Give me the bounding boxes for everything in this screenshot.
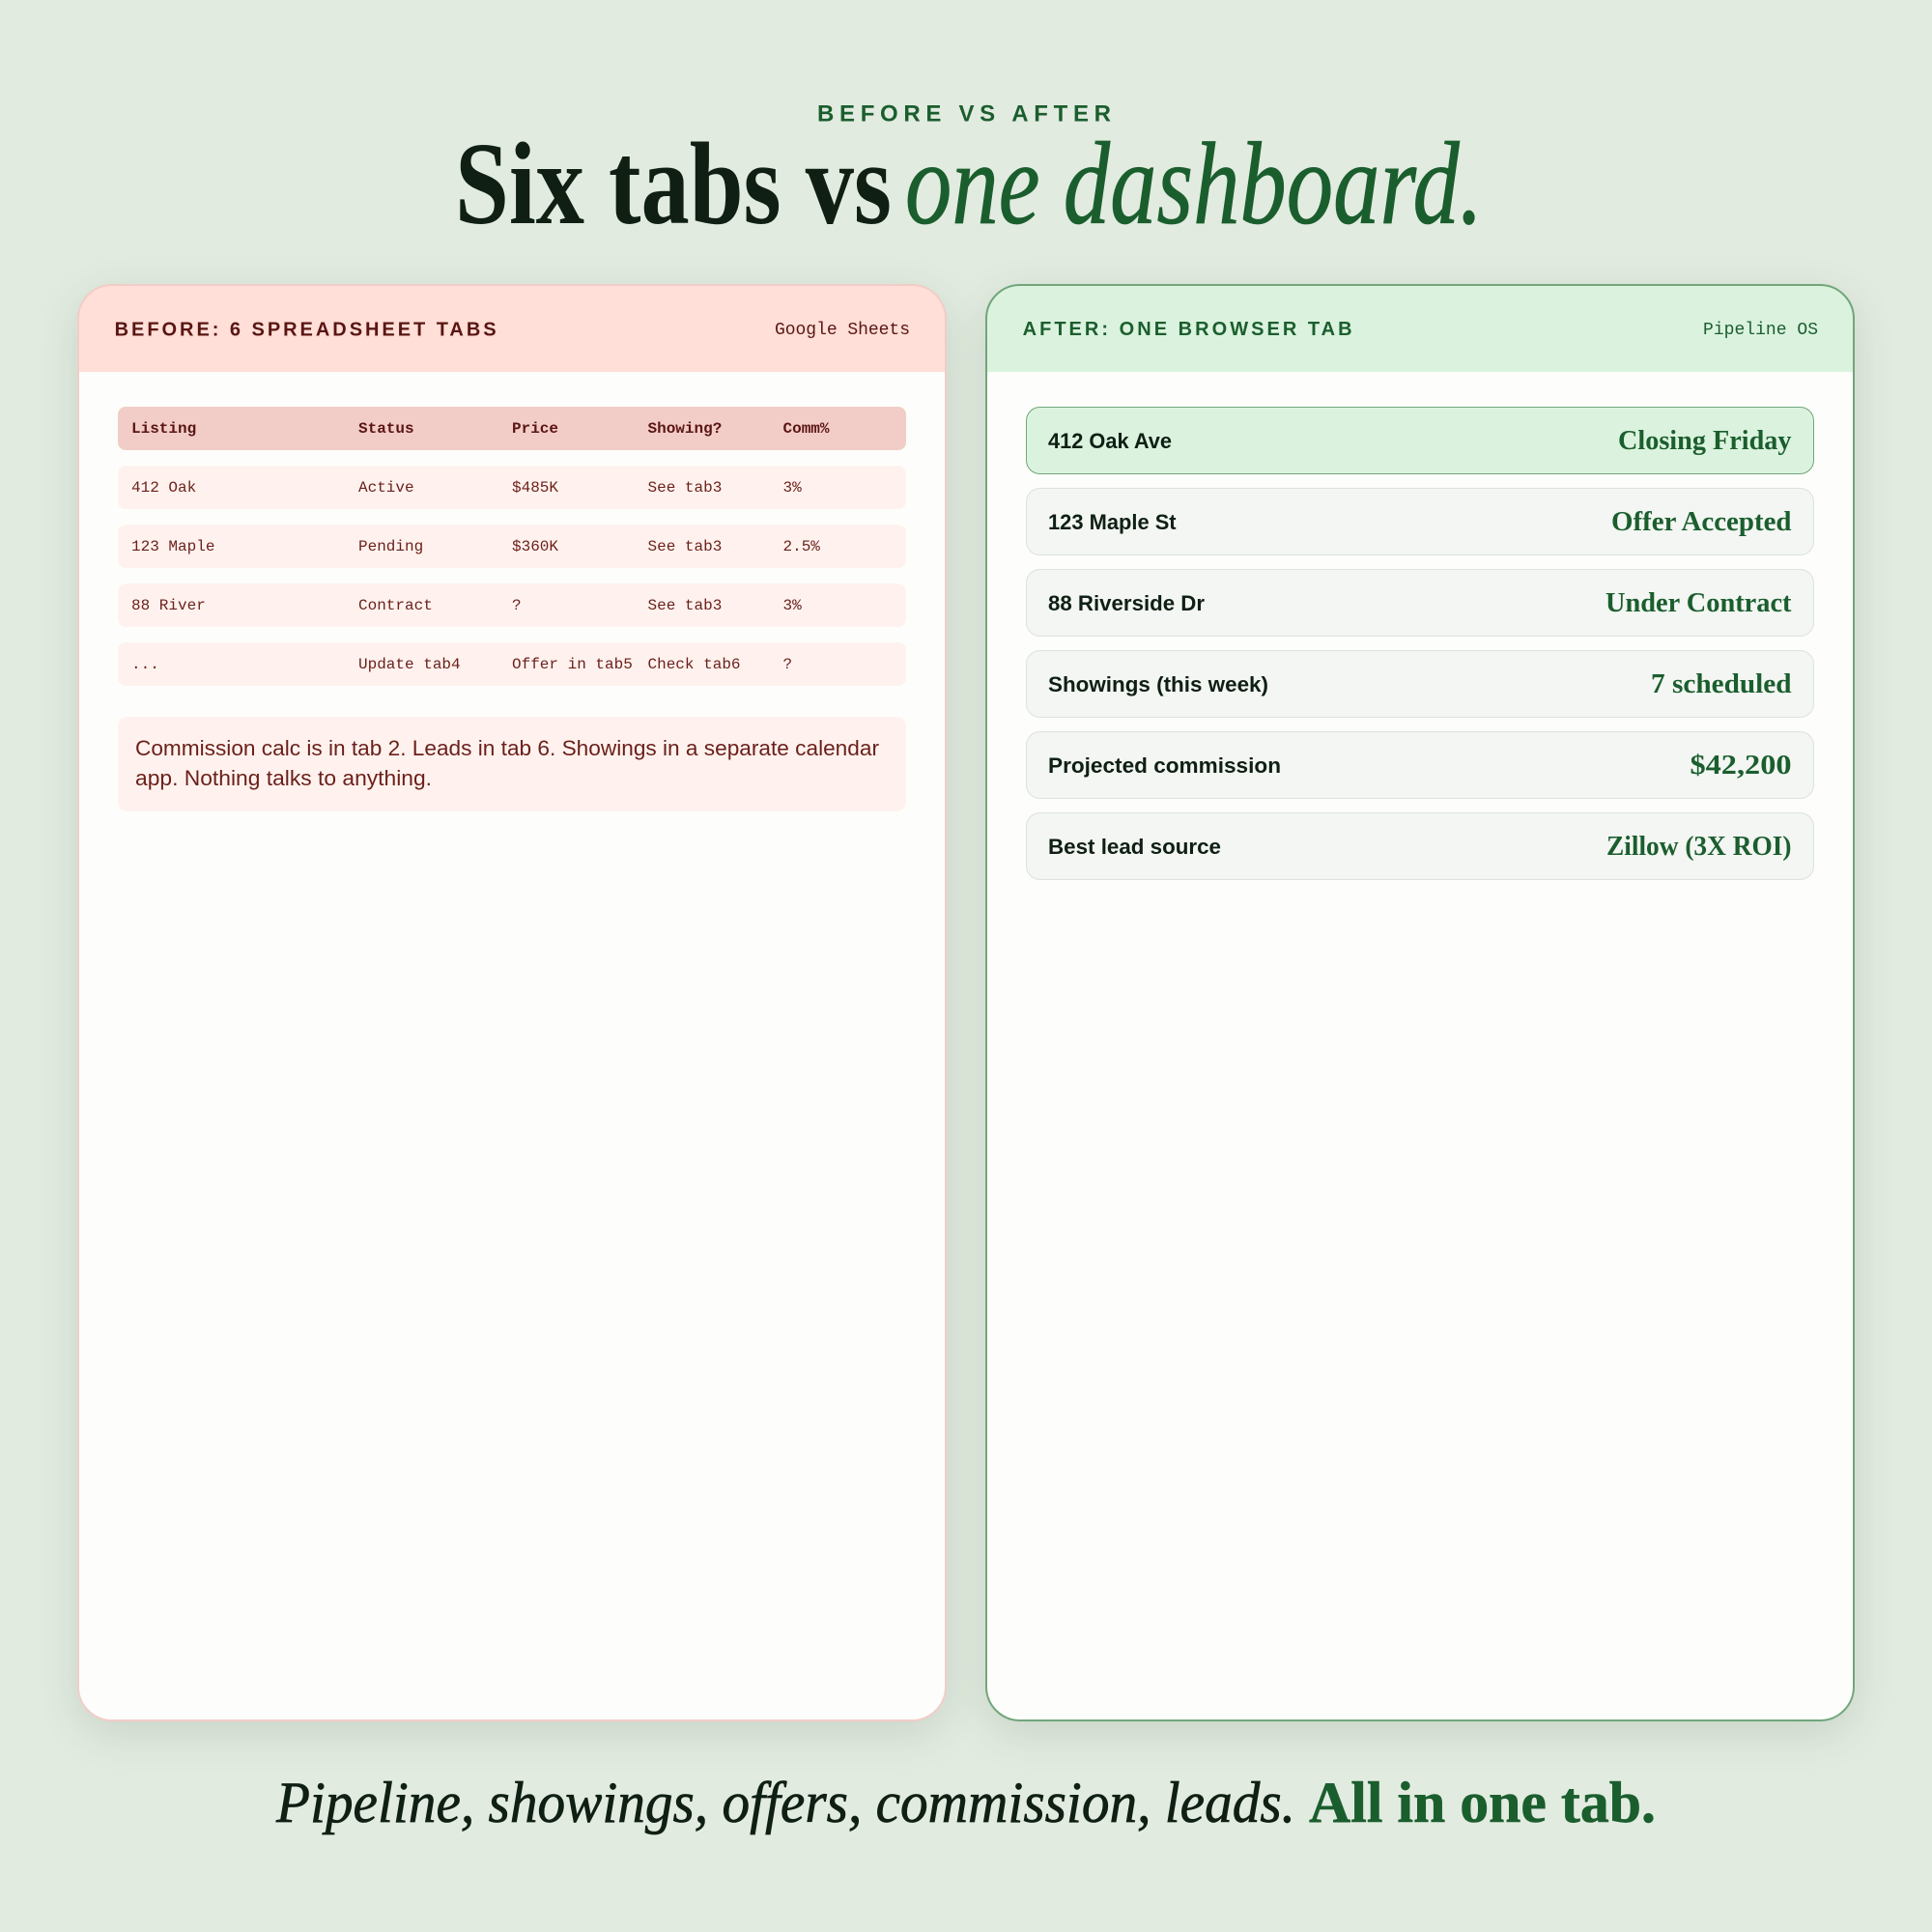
tool label: pipeline os: Pipeline OS [1703, 321, 1818, 340]
dashboard row: 123 Maple St: 123 Maple St [1048, 510, 1177, 534]
table row: 88 River: See tab3 [647, 597, 722, 614]
tagline: all in one tab: All in one tab. [1309, 1771, 1656, 1834]
dashboard row: best lead source: Zillow (3X ROI) [1606, 832, 1791, 862]
table row: 412 Oak: See tab3 [647, 479, 722, 497]
table header row: Comm% [782, 420, 830, 438]
title [455, 119, 1483, 249]
before heading: BEFORE: 6 SPREADSHEET TABS [115, 319, 497, 340]
table row: 123 Maple [118, 525, 906, 568]
table row: 88 River: 3% [782, 597, 802, 614]
tagline: list of features: Pipeline, showings, offers, commission, leads. [275, 1771, 1295, 1834]
table row: overflow: Update tab4 [358, 656, 461, 673]
tool label: google sheets: Google Sheets [775, 321, 910, 340]
title part: one dashboard: one dashboard. [905, 119, 1483, 249]
table row: 123 Maple: $360K [512, 538, 558, 555]
dashboard row: 123 Maple St: Offer Accepted [1611, 507, 1792, 537]
table row: 123 Maple: 2.5% [782, 538, 820, 555]
title part: six tabs vs: Six tabs vs [455, 119, 892, 249]
table row: 123 Maple: See tab3 [647, 538, 722, 555]
table row: 123 Maple: Pending [358, 538, 423, 555]
table row: overflow: ... [131, 656, 159, 673]
dashboard row: projected commission: $42,200 [1690, 751, 1791, 781]
dashboard row: 88 Riverside Dr: Under Contract [1605, 588, 1792, 618]
dashboard row: best lead source [1026, 813, 1814, 879]
before card body [78, 285, 946, 1720]
dashboard row: best lead source: Best lead source [1048, 835, 1221, 859]
table row: 88 River [118, 583, 906, 627]
table row: overflow: Offer in tab5 [512, 656, 633, 673]
after heading: AFTER: ONE BROWSER TAB [1023, 319, 1352, 340]
table header row [118, 407, 906, 450]
note: nothing talks to anything [118, 717, 906, 811]
dashboard row: 88 Riverside Dr [1026, 570, 1814, 636]
dashboard row: showings this week: 7 scheduled [1651, 669, 1792, 699]
panel: after, one browser tab [985, 285, 1855, 1733]
panel: before, six spreadsheet tabs [77, 285, 947, 1733]
table row: overflow: ? [782, 656, 792, 673]
dashboard row: projected commission [1026, 732, 1814, 798]
table row: 412 Oak: 3% [782, 479, 802, 497]
table row: 88 River: 88 River [131, 597, 206, 614]
dashboard row: 412 Oak Ave [1026, 408, 1814, 473]
dashboard row: showings this week [1026, 651, 1814, 717]
dashboard row: 412 Oak Ave: Closing Friday [1618, 426, 1791, 456]
note: nothing talks to anything: Commission calc is in tab 2. Leads in tab 6. Showings in a separate calendar [135, 736, 879, 760]
table row: overflow: Check tab6 [647, 656, 741, 673]
eyebrow: before vs after: BEFORE VS AFTER [817, 101, 1111, 128]
table header row: Status [358, 420, 414, 438]
after card body [986, 285, 1854, 1720]
table header row: Listing [131, 420, 196, 438]
table header row: Showing? [647, 420, 722, 438]
table row: 88 River: Contract [358, 597, 433, 614]
table row: 412 Oak: Active [358, 479, 414, 497]
dashboard row: projected commission: Projected commission [1048, 753, 1281, 778]
table header row: Price [512, 420, 558, 438]
dashboard row: 123 Maple St [1026, 489, 1814, 554]
dashboard row: 88 Riverside Dr: 88 Riverside Dr [1048, 591, 1205, 615]
table row: 88 River: ? [512, 597, 522, 614]
table row: 412 Oak: 412 Oak [131, 479, 196, 497]
after card header band [986, 285, 1854, 372]
table row: overflow [118, 642, 906, 686]
dashboard row: 412 Oak Ave: 412 Oak Ave [1048, 429, 1172, 453]
before card header band [78, 285, 946, 372]
footer tagline [275, 1771, 1656, 1834]
table row: 412 Oak: $485K [512, 479, 558, 497]
table row: 412 Oak [118, 466, 906, 509]
table row: 123 Maple: 123 Maple [131, 538, 214, 555]
note: nothing talks to anything: app. Nothing talks to anything. [135, 766, 432, 790]
dashboard row: showings this week: Showings (this week) [1048, 672, 1268, 696]
spreadsheet table [118, 407, 906, 686]
